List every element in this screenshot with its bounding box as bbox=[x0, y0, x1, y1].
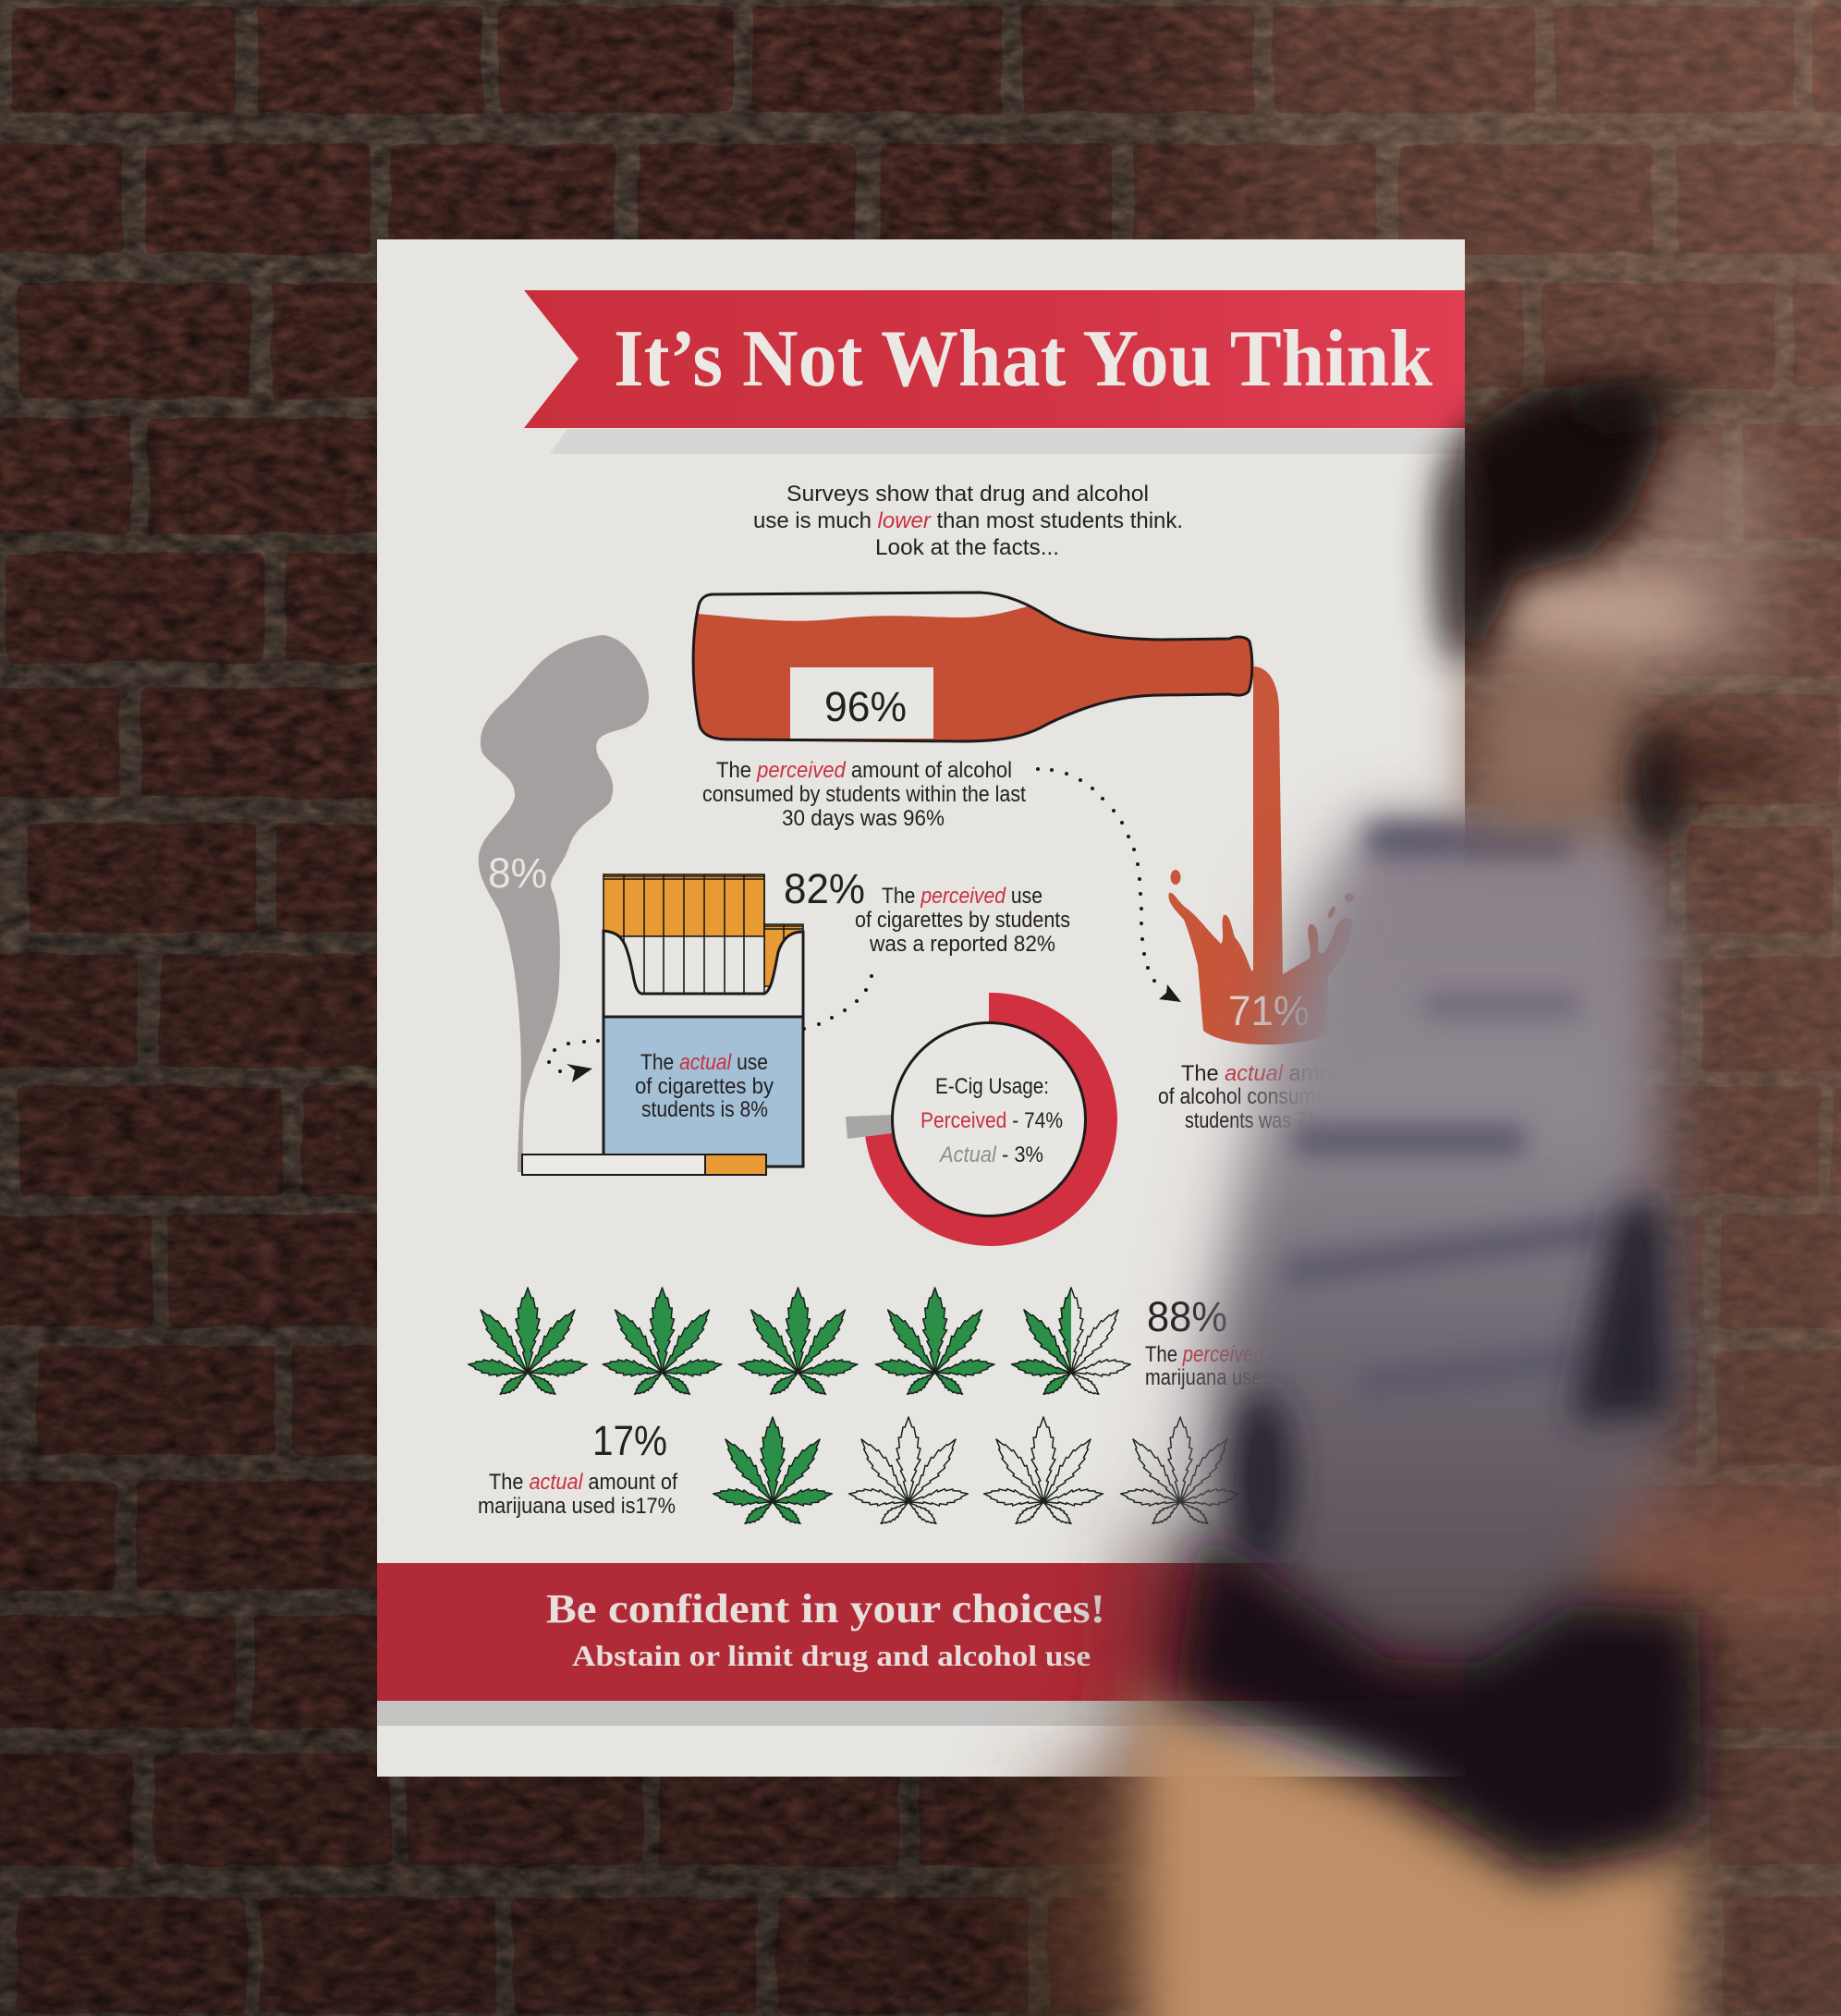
marijuana actual row: 17% bbox=[712, 1417, 1241, 1528]
perceived alcohol caption: consumed by students within the last bbox=[702, 782, 1026, 807]
marijuana actual text: marijuana used is17% bbox=[478, 1494, 676, 1519]
alcohol actual caption: The actual amount bbox=[1181, 1061, 1361, 1086]
intro text bbox=[753, 482, 1183, 560]
marijuana actual text: 17% bbox=[592, 1417, 667, 1464]
hair bbox=[1453, 381, 1664, 666]
donut text: E-Cig Usage: bbox=[935, 1074, 1049, 1099]
lying cigarette bbox=[522, 1155, 766, 1175]
bottle liquid bbox=[695, 606, 1251, 739]
shoulder shadow bbox=[1631, 725, 1788, 847]
lightened wall beside face bbox=[1636, 444, 1779, 675]
intro text: Look at the facts... bbox=[875, 535, 1059, 560]
tan trousers bbox=[1137, 1692, 1687, 2016]
pack text bbox=[635, 1050, 774, 1122]
donut text: Actual - 3% bbox=[938, 1142, 1043, 1167]
perceived 74% arc bbox=[865, 993, 1117, 1246]
alcohol actual caption: students was 71% bbox=[1185, 1108, 1333, 1133]
wine bottle: perceived alcohol 96% bbox=[689, 593, 1294, 749]
bottom call-to-action band: Be confident in your choices! bbox=[546, 1586, 1105, 1631]
82% perceived cigarettes bbox=[784, 865, 1070, 957]
bottle outline bbox=[693, 593, 1252, 741]
marijuana perceived text bbox=[1145, 1293, 1353, 1390]
pouring stream and splash: actual 71% bbox=[1168, 666, 1354, 1045]
smoke with actual cigarette percentage: 8% bbox=[488, 849, 547, 897]
96% label: 96% bbox=[824, 683, 907, 730]
marijuana actual text: The actual amount of bbox=[489, 1470, 677, 1495]
perceived alcohol caption: 30 days was 96% bbox=[782, 806, 945, 831]
82% perceived cigarettes: The perceived use bbox=[882, 884, 1042, 909]
title banner: It’s Not What You Think bbox=[614, 314, 1433, 404]
intro text: use is much lower than most students think. bbox=[753, 508, 1183, 533]
96% label bbox=[790, 667, 933, 739]
smoke with actual cigarette percentage bbox=[479, 635, 649, 1172]
pack text: The actual use bbox=[640, 1050, 768, 1075]
bottom call-to-action band bbox=[377, 1563, 1465, 1726]
pack upper front with cut-out curve bbox=[604, 931, 803, 1017]
alcohol actual caption: of alcohol consumed by bbox=[1158, 1084, 1363, 1109]
marijuana actual text bbox=[478, 1417, 677, 1519]
blurred passer-by bbox=[1044, 379, 1841, 2016]
alcohol actual caption bbox=[1158, 1061, 1363, 1133]
dotted arrows: cigarettes bbox=[547, 974, 873, 1082]
perceived alcohol caption: The perceived amount of alcohol bbox=[716, 758, 1012, 783]
intro text: Surveys show that drug and alcohol bbox=[786, 482, 1149, 507]
pack text: students is 8% bbox=[641, 1097, 768, 1122]
marijuana perceived text: The perceived amount of bbox=[1145, 1342, 1353, 1367]
hair top taper bbox=[1571, 379, 1719, 425]
poster paper bbox=[377, 239, 1465, 1777]
marijuana perceived text: marijuana used was 88% bbox=[1145, 1365, 1353, 1390]
wide soft halo bbox=[1044, 887, 1841, 2016]
donut text: Perceived - 74% bbox=[920, 1108, 1063, 1133]
marijuana perceived text: 88% bbox=[1147, 1293, 1227, 1340]
marijuana perceived row: 88% bbox=[467, 1288, 1132, 1399]
donut centre bbox=[893, 1022, 1085, 1216]
cigarette pack bbox=[522, 874, 803, 1175]
perceived alcohol caption bbox=[702, 758, 1026, 831]
dark waist bbox=[1174, 1525, 1701, 1867]
82% perceived cigarettes: was a reported 82% bbox=[869, 932, 1055, 957]
hair halo on poster bbox=[1433, 448, 1473, 661]
donut text bbox=[920, 1074, 1063, 1167]
bottom call-to-action band: Abstain or limit drug and alcohol use bbox=[572, 1639, 1091, 1672]
cigarettes row bbox=[604, 874, 803, 994]
neck and skin bbox=[1469, 656, 1654, 827]
title banner bbox=[524, 290, 1465, 454]
actual 3% wedge bbox=[846, 1115, 893, 1139]
pack text: of cigarettes by bbox=[635, 1074, 774, 1099]
face bbox=[1474, 564, 1714, 660]
82% perceived cigarettes: 82% bbox=[784, 865, 865, 912]
pack lower blue bbox=[604, 1017, 803, 1167]
82% perceived cigarettes: of cigarettes by students bbox=[855, 908, 1070, 933]
shirt stripes bbox=[1285, 823, 1608, 1398]
dotted arrow: perceived to actual alcohol bbox=[1036, 767, 1181, 1002]
poster bbox=[377, 239, 1465, 1777]
shirt dark sides bbox=[1230, 1202, 1673, 1567]
pouring stream and splash: actual 71%: 71% bbox=[1228, 987, 1310, 1034]
shirt bbox=[1225, 813, 1673, 1701]
e-cig donut chart bbox=[846, 993, 1117, 1246]
